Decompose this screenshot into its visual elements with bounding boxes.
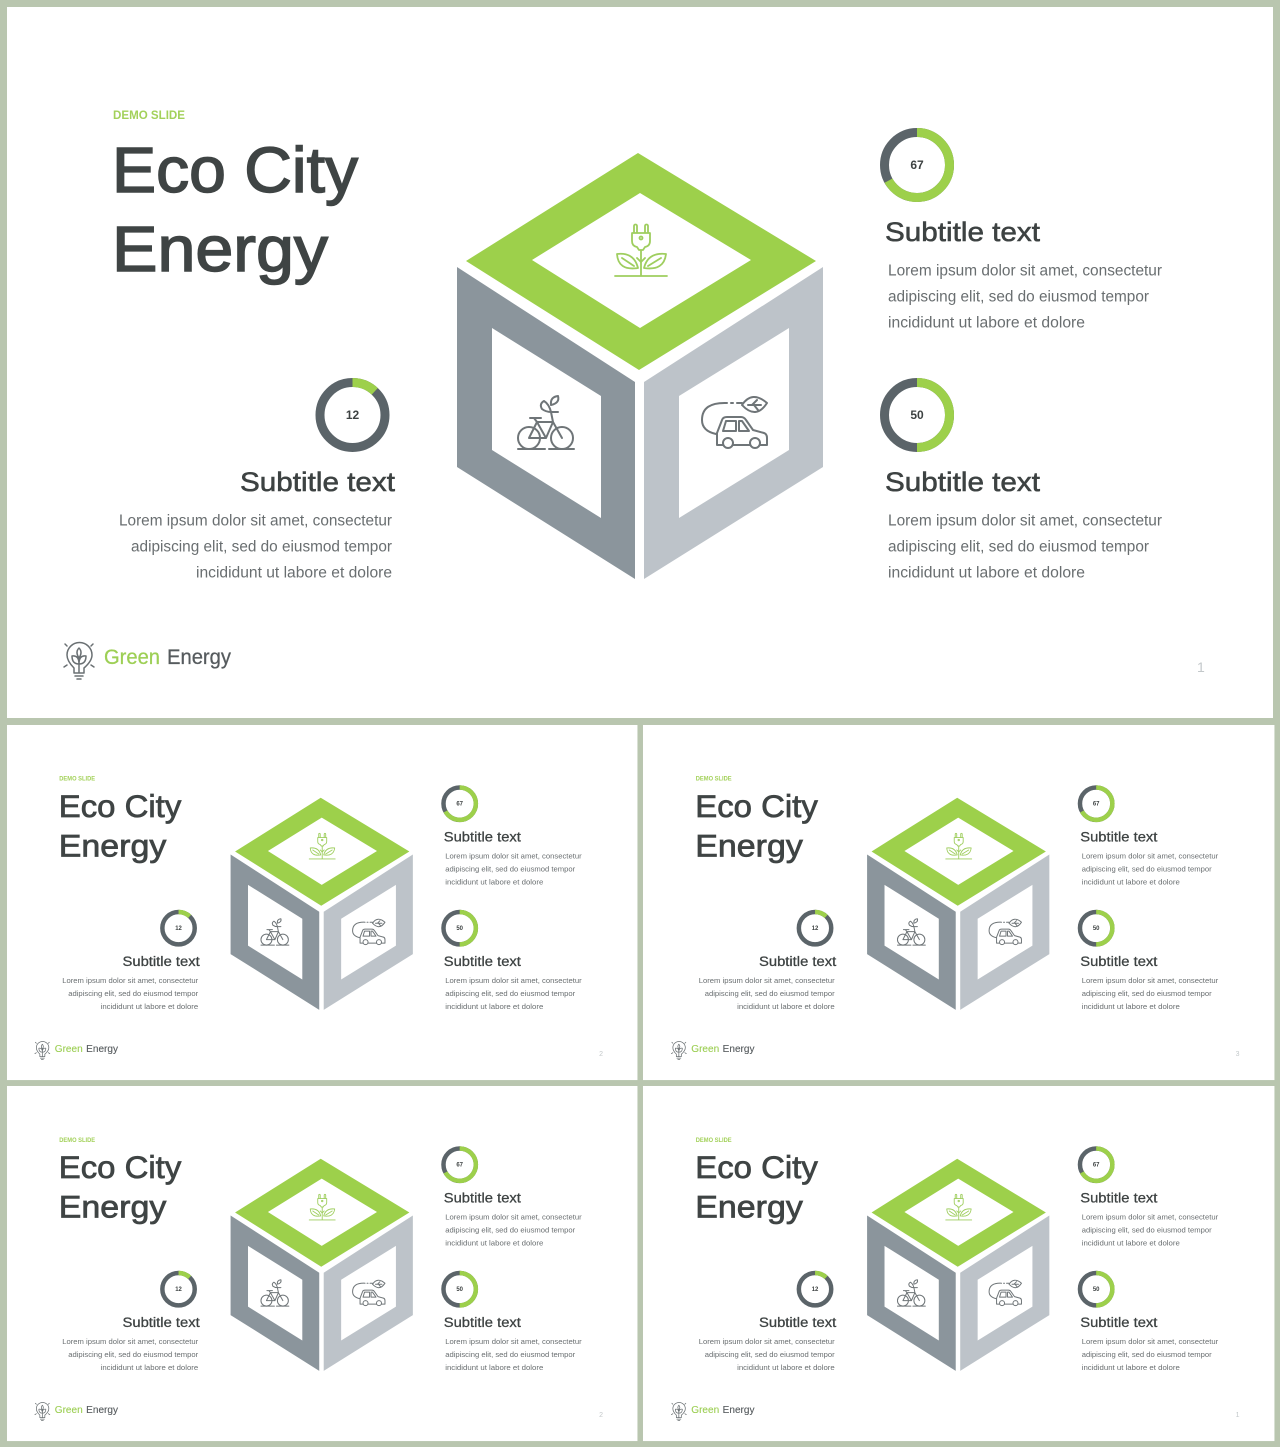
donut: 50 — [884, 382, 950, 448]
panel: thumbnail slide 2: Energy — [59, 827, 166, 863]
panel: thumbnail slide 3: incididunt ut labore et dolore — [737, 1002, 835, 1011]
panel: thumbnail slide 4: Subtitle text — [444, 1315, 521, 1330]
text block: left: incididunt ut labore et dolore — [196, 564, 392, 582]
cube right face — [644, 267, 823, 579]
text block: bottom right — [885, 467, 1162, 582]
panel: thumbnail slide 3: adipiscing elit, sed do eiusmod tempor — [705, 989, 835, 998]
panel: thumbnail slide 5: Energy — [695, 1188, 803, 1224]
panel: thumbnail slide 4: Energy — [86, 1405, 119, 1416]
panel: thumbnail slide 4: Eco City — [59, 1149, 181, 1185]
panel: thumbnail slide 2: DEMO SLIDE — [59, 777, 95, 783]
text block: left: adipiscing elit, sed do eiusmod tempor — [131, 538, 392, 556]
panel: thumbnail slide 3: incididunt ut labore et dolore — [1082, 878, 1180, 887]
panel: thumbnail slide 3: 12 — [812, 926, 819, 932]
text block: top right: adipiscing elit, sed do eiusmod tempor — [888, 288, 1149, 306]
panel: thumbnail slide 4: Lorem ipsum dolor sit amet, consectetur — [445, 1337, 582, 1346]
panel: thumbnail slide 3: Subtitle text — [1080, 830, 1158, 845]
panel: thumbnail slide 3: Lorem ipsum dolor sit amet, consectetur — [1082, 976, 1219, 985]
panel: thumbnail slide 5: 1 — [1236, 1412, 1240, 1419]
text block: bottom right: Lorem ipsum dolor sit amet, consectetur — [888, 512, 1162, 530]
title — [112, 134, 358, 285]
panel: thumbnail slide 2: 12 — [175, 926, 183, 932]
panel: thumbnail slide 3: Subtitle text — [1080, 954, 1158, 969]
panel: thumbnail slide 4 — [7, 1086, 637, 1441]
panel: thumbnail slide 5: Eco City — [695, 1149, 818, 1185]
title: Energy — [112, 213, 328, 285]
panel: thumbnail slide 5: Green — [691, 1405, 719, 1416]
text block: left: Lorem ipsum dolor sit amet, consectetur — [119, 512, 392, 530]
panel: thumbnail slide 5: Lorem ipsum dolor sit amet, consectetur — [1082, 1213, 1219, 1222]
panel: thumbnail slide 4: incididunt ut labore et dolore — [445, 1239, 543, 1248]
panel: thumbnail slide 3 — [643, 725, 1274, 1080]
panel: thumbnail slide 5: Subtitle text — [759, 1315, 836, 1330]
panel: thumbnail slide 5: 50 — [1093, 1287, 1100, 1293]
panel: thumbnail slide 3: incididunt ut labore et dolore — [1082, 1002, 1180, 1011]
cube top face — [466, 153, 816, 370]
cube diagram — [457, 153, 823, 579]
panel: thumbnail slide 5: Subtitle text — [1080, 1191, 1158, 1206]
panel: thumbnail slide 4: 12 — [175, 1287, 183, 1293]
panel: thumbnail slide 5: 12 — [812, 1287, 819, 1293]
panel: thumbnail slide 3: adipiscing elit, sed do eiusmod tempor — [1082, 865, 1212, 874]
panel: thumbnail slide 5: Subtitle text — [1080, 1315, 1158, 1330]
panel: thumbnail slide 3: Lorem ipsum dolor sit amet, consectetur — [699, 976, 835, 985]
panel: thumbnail slide 5: DEMO SLIDE — [696, 1138, 732, 1144]
text block: top right: Lorem ipsum dolor sit amet, consectetur — [888, 262, 1162, 280]
text block: left: Subtitle text — [240, 467, 396, 497]
panel: thumbnail slide 4: DEMO SLIDE — [59, 1138, 95, 1144]
logo — [64, 642, 231, 679]
text block: bottom right: Subtitle text — [885, 467, 1041, 497]
panel: thumbnail slide 2: incididunt ut labore et dolore — [101, 1002, 198, 1011]
panel: thumbnail slide 2: 67 — [456, 802, 464, 808]
panel: thumbnail slide 2 — [7, 725, 637, 1080]
panel: thumbnail slide 5: Lorem ipsum dolor sit amet, consectetur — [699, 1337, 835, 1346]
panel: thumbnail slide 2: Eco City — [59, 788, 181, 824]
panel: thumbnail slide 2: Subtitle text — [444, 954, 521, 969]
donut: 67: 67 — [910, 158, 924, 172]
logo: Energy — [167, 646, 231, 669]
panel: thumbnail slide 4: adipiscing elit, sed do eiusmod tempor — [68, 1350, 199, 1359]
panel: thumbnail slide 2: Energy — [86, 1044, 119, 1055]
panel: thumbnail slide 4: adipiscing elit, sed do eiusmod tempor — [445, 1226, 576, 1235]
panel: thumbnail slide 5: 67 — [1093, 1163, 1100, 1169]
panel: main slide — [7, 7, 1273, 718]
panel: thumbnail slide 2: Subtitle text — [444, 830, 521, 845]
text block: bottom right: incididunt ut labore et dolore — [888, 564, 1085, 582]
panel: thumbnail slide 2: Lorem ipsum dolor sit amet, consectetur — [445, 852, 582, 861]
panel: thumbnail slide 2: Lorem ipsum dolor sit amet, consectetur — [62, 976, 199, 985]
text block: top right: incididunt ut labore et dolore — [888, 314, 1085, 332]
panel: thumbnail slide 3: 50 — [1093, 926, 1100, 932]
panel: thumbnail slide 5: incididunt ut labore et dolore — [737, 1363, 835, 1372]
panel: thumbnail slide 3: adipiscing elit, sed do eiusmod tempor — [1082, 989, 1212, 998]
panel: thumbnail slide 3: Subtitle text — [759, 954, 836, 969]
page number: 1 — [1197, 659, 1205, 675]
panel: thumbnail slide 4: Lorem ipsum dolor sit amet, consectetur — [62, 1337, 199, 1346]
panel: thumbnail slide 5: incididunt ut labore et dolore — [1082, 1363, 1180, 1372]
label: demo slide: DEMO SLIDE — [113, 108, 185, 122]
panel: thumbnail slide 3: Energy — [723, 1044, 755, 1055]
text block: bottom right: adipiscing elit, sed do eiusmod tempor — [888, 538, 1149, 556]
icon: bicycle — [518, 396, 574, 449]
cube left face — [457, 267, 635, 579]
panel: thumbnail slide 4: Green — [55, 1405, 83, 1416]
donut: 67 — [884, 132, 950, 198]
panel: thumbnail slide 3: Energy — [695, 827, 803, 863]
panel: thumbnail slide 4: 50 — [456, 1287, 464, 1293]
icon: eco car — [702, 397, 767, 448]
text block: top right: Subtitle text — [885, 217, 1041, 247]
panel: thumbnail slide 2: Green — [55, 1044, 83, 1055]
icon: plug plant — [615, 224, 667, 276]
panel: thumbnail slide 4: Subtitle text — [123, 1315, 200, 1330]
panel: thumbnail slide 4: incididunt ut labore et dolore — [445, 1363, 543, 1372]
donut: 50: 50 — [910, 408, 924, 422]
panel: thumbnail slide 3: 67 — [1093, 802, 1100, 808]
donut: 12 — [320, 382, 385, 448]
panel: thumbnail slide 2: Subtitle text — [123, 954, 200, 969]
title: Eco City — [112, 134, 358, 206]
panel: thumbnail slide 4: adipiscing elit, sed do eiusmod tempor — [445, 1350, 576, 1359]
donut: 12: 12 — [346, 408, 359, 422]
panel: thumbnail slide 4: incididunt ut labore et dolore — [101, 1363, 198, 1372]
text block: top right — [885, 217, 1162, 332]
panel: thumbnail slide 2: adipiscing elit, sed do eiusmod tempor — [445, 989, 576, 998]
panel: thumbnail slide 3: DEMO SLIDE — [696, 777, 732, 783]
panel: thumbnail slide 3: 3 — [1236, 1051, 1240, 1058]
panel: thumbnail slide 2: 2 — [599, 1051, 603, 1058]
panel: thumbnail slide 4: 2 — [599, 1412, 603, 1419]
logo: Green — [104, 646, 160, 669]
panel: thumbnail slide 5: adipiscing elit, sed do eiusmod tempor — [1082, 1350, 1212, 1359]
panel: thumbnail slide 5: Energy — [723, 1405, 755, 1416]
panel: thumbnail slide 2: 50 — [456, 926, 464, 932]
panel: thumbnail slide 5: adipiscing elit, sed do eiusmod tempor — [705, 1350, 835, 1359]
panel: thumbnail slide 4: 67 — [456, 1163, 464, 1169]
panel: thumbnail slide 2: incididunt ut labore et dolore — [445, 1002, 543, 1011]
panel: thumbnail slide 2: incididunt ut labore et dolore — [445, 878, 543, 887]
panel: thumbnail slide 2: adipiscing elit, sed do eiusmod tempor — [68, 989, 199, 998]
panel: thumbnail slide 2: adipiscing elit, sed do eiusmod tempor — [445, 865, 576, 874]
panel: thumbnail slide 3: Green — [691, 1044, 719, 1055]
panel: thumbnail slide 4: Energy — [59, 1188, 166, 1224]
panel: thumbnail slide 5: adipiscing elit, sed do eiusmod tempor — [1082, 1226, 1212, 1235]
panel: thumbnail slide 3: Eco City — [695, 788, 818, 824]
panel: thumbnail slide 5: incididunt ut labore et dolore — [1082, 1239, 1180, 1248]
panel: thumbnail slide 4: Subtitle text — [444, 1191, 521, 1206]
panel: thumbnail slide 2: Lorem ipsum dolor sit amet, consectetur — [445, 976, 582, 985]
panel: thumbnail slide 5 — [643, 1086, 1274, 1441]
panel: thumbnail slide 3: Lorem ipsum dolor sit amet, consectetur — [1082, 852, 1219, 861]
panel: thumbnail slide 4: Lorem ipsum dolor sit amet, consectetur — [445, 1213, 582, 1222]
panel: thumbnail slide 5: Lorem ipsum dolor sit amet, consectetur — [1082, 1337, 1219, 1346]
text block: left — [119, 467, 396, 582]
